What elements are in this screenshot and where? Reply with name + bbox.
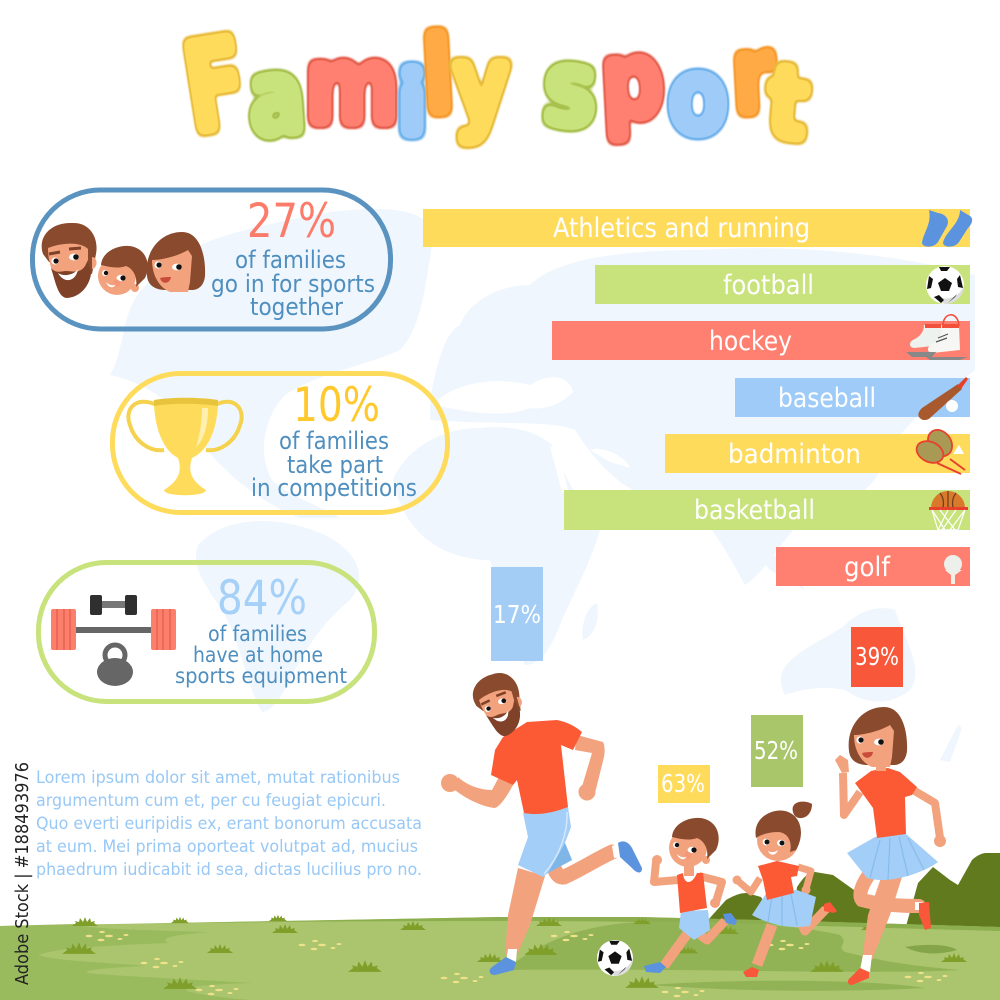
caption: equipment (175, 622, 347, 688)
caption: together: together (250, 293, 343, 321)
percentage box: 17% (491, 567, 543, 661)
ground (0, 917, 1000, 1000)
kicking leg (552, 852, 612, 877)
bar: football (595, 265, 970, 304)
title: Family sport: y (452, 23, 510, 146)
bar: baseball: baseball (778, 383, 876, 414)
shorts (518, 807, 572, 877)
title: Family sport: F (174, 11, 257, 163)
lorem ipsum text block: Quo everti euripidis ex, erant bonorum accusata (36, 814, 422, 834)
percentage box: 63%: 63% (661, 769, 705, 798)
caption: competitions: in competitions (251, 474, 417, 502)
percentage box: 39%: 39% (855, 642, 899, 671)
arms (455, 775, 513, 808)
panel: families in competitions (112, 374, 448, 512)
caption: competitions: of families (279, 427, 389, 455)
bar: hockey: hockey (709, 326, 792, 357)
title: Family sport: r (729, 13, 777, 138)
lorem ipsum text block: Lorem ipsum dolor sit amet, mutat rationibus (36, 768, 400, 788)
caption: together: go in for sports (211, 270, 375, 298)
percentage box: 17%: 17% (493, 600, 541, 629)
bar: baseball (735, 377, 970, 420)
caption: competitions: take part (287, 451, 383, 479)
stat: 10%: 10% (293, 378, 380, 433)
bar: basketball: basketball (694, 495, 815, 526)
bar: badminton (665, 425, 970, 474)
title: Family sport (174, 11, 814, 164)
icon: ice skates (906, 315, 968, 360)
title: Family sport: l (420, 14, 457, 139)
icon: family faces (42, 223, 205, 298)
bar: athletics and running (423, 209, 972, 247)
bar: football: football (723, 270, 814, 301)
bar: hockey (552, 315, 970, 360)
shirt (491, 720, 582, 814)
caption: competitions (251, 427, 417, 502)
percentage box: 63% (658, 765, 710, 803)
grass tufts and flowers (62, 915, 967, 997)
lorem ipsum text block: phaedrum iudicabit id sea, dictas lucilius pro no. (36, 860, 422, 880)
figure: son (644, 818, 737, 973)
icon: basketball hoop (929, 491, 968, 530)
world map background (110, 209, 975, 762)
figure: father (441, 668, 642, 975)
bar: golf: golf (844, 552, 891, 583)
bar: basketball (564, 490, 970, 530)
map inland water (433, 377, 630, 492)
side credit text: Adobe Stock | #188493976 (12, 762, 33, 985)
icon: golf ball on tee (944, 555, 962, 584)
title: Family sport: t (762, 43, 814, 164)
lorem ipsum text block: argumentum cum et, per cu feugiat epicuri. (36, 791, 386, 811)
icon: running shoes (922, 210, 972, 247)
title: Family sport: o (668, 35, 728, 158)
lorem ipsum text block (36, 768, 422, 880)
title: Family sport: p (597, 18, 667, 144)
figure: daughter (732, 802, 837, 977)
icon: trophy (128, 398, 242, 495)
title: Family sport: s (539, 26, 602, 152)
title: Family sport: m (305, 22, 399, 149)
panel: sports equipment at home (38, 562, 374, 702)
bar: badminton: badminton (728, 439, 861, 470)
icon: soccer ball on the grass (597, 940, 633, 976)
panel: families doing sport together (32, 190, 390, 329)
caption: equipment: of families (208, 622, 307, 646)
caption: together: of families (235, 246, 346, 274)
percentage box: 52% (751, 715, 803, 787)
bar: golf (776, 547, 970, 586)
title: Family sport: i (397, 52, 427, 157)
icon: soccer ball (926, 266, 964, 304)
caption: equipment: sports equipment (175, 664, 347, 688)
caption: equipment: have at home (193, 643, 323, 667)
standing leg (505, 868, 545, 955)
stat: 84%: 84% (217, 571, 307, 626)
stat: 27%: 27% (247, 194, 336, 249)
icon: bat and ball (918, 377, 968, 420)
bushes (708, 853, 1000, 935)
title: Family sport: a (244, 34, 309, 161)
percentage box: 52%: 52% (754, 736, 798, 765)
icon: barbell, dumbbell, kettlebell (51, 595, 176, 686)
percentage box: 39% (851, 627, 903, 687)
figure: mother (835, 707, 946, 985)
icon: rackets and shuttlecock (913, 425, 965, 474)
caption: together (211, 246, 375, 321)
head (468, 668, 530, 742)
lorem ipsum text block: at eum. Mei prima oporteat volutpat ad, mucius (36, 837, 418, 857)
bar: athletics and running: Athletics and running (553, 213, 810, 244)
